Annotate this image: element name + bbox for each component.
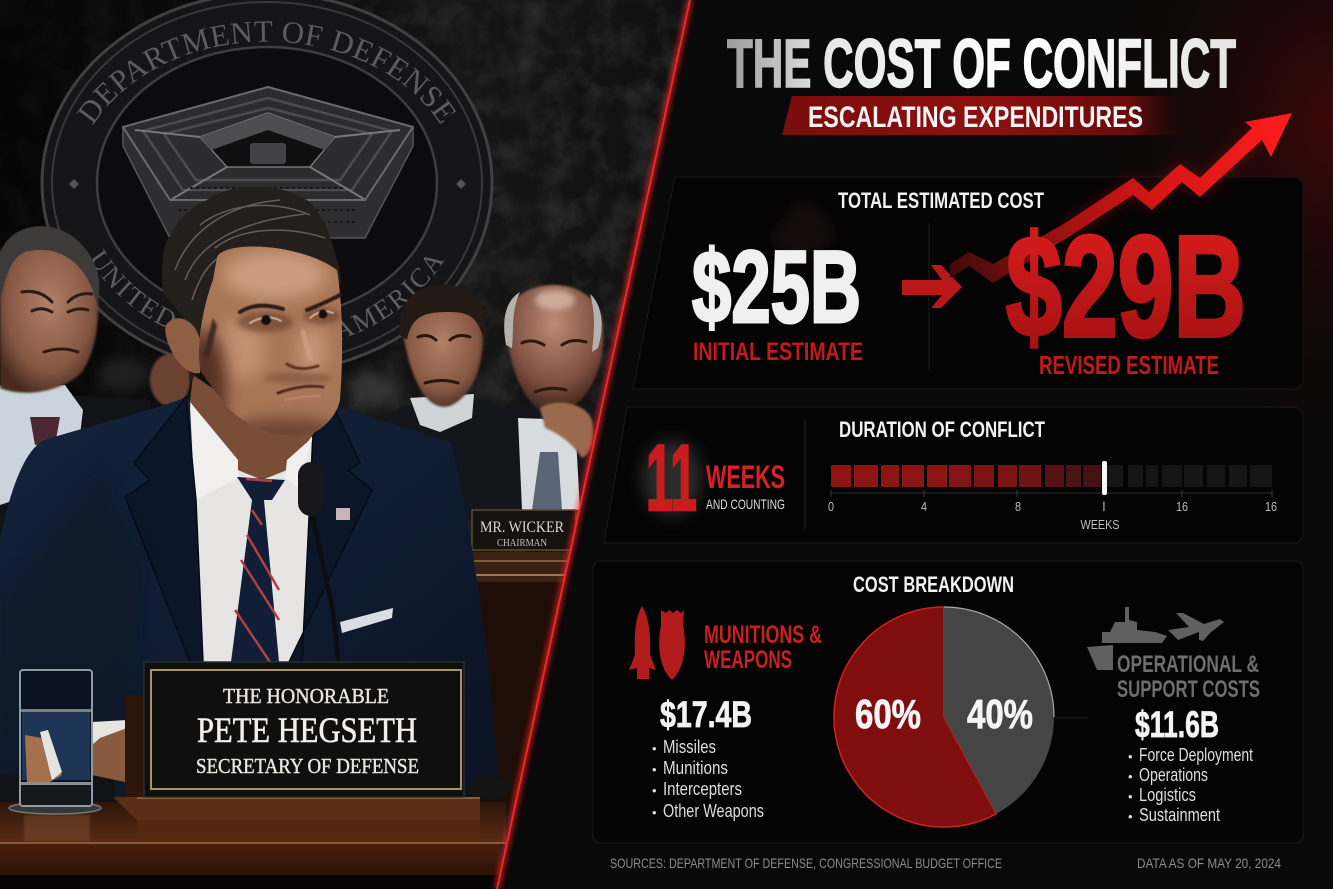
operational and support costs [1117, 651, 1260, 825]
11 weeks stat: AND COUNTING [706, 496, 785, 512]
pie chart: 40% [967, 691, 1033, 737]
operational and support costs: Force Deployment [1139, 745, 1253, 765]
hand [92, 720, 127, 782]
shirt [190, 407, 312, 662]
panel: duration of conflict [604, 407, 1303, 543]
operational and support costs: Sustainment [1139, 805, 1220, 825]
figure: Pete Hegseth [0, 187, 498, 800]
footer sources: SOURCES: DEPARTMENT OF DEFENSE, CONGRESSIONAL BUDGET OFFICE [610, 855, 1002, 871]
munitions and weapons: • [652, 783, 657, 798]
figure: man back center [378, 285, 520, 520]
subtitle banner: ESCALATING EXPENDITURES [808, 101, 1143, 134]
operational and support costs: Logistics [1139, 785, 1196, 805]
collar [190, 402, 313, 500]
11 weeks stat [642, 425, 785, 530]
sleeve shadow [0, 470, 140, 800]
nameplate: Mr. Wicker: MR. WICKER [480, 519, 564, 536]
munitions and weapons: Intercepters [663, 779, 742, 799]
figure: revised estimate: REVISED ESTIMATE [1039, 350, 1219, 380]
pie chart: 60% [855, 691, 921, 737]
pocket square [340, 608, 393, 633]
facial features [240, 295, 340, 400]
seal: department of defense: DEPARTMENT OF DEFENSE [76, 21, 456, 125]
suit [0, 397, 498, 800]
munitions and weapons [652, 621, 822, 821]
icon: seal diamonds [69, 179, 466, 189]
munitions and weapons: • [652, 741, 657, 756]
ear [165, 318, 200, 373]
neck [190, 375, 320, 480]
axis labels: 16 [1176, 499, 1188, 514]
nameplate: Pete Hegseth: THE HONORABLE [223, 684, 389, 708]
faint mountain silhouette [770, 200, 835, 262]
hair back [162, 187, 341, 383]
rising red arrow [950, 113, 1292, 283]
11 weeks stat: WEEKS [706, 459, 785, 495]
operational and support costs: • [1128, 789, 1133, 804]
operational and support costs: • [1128, 809, 1133, 824]
axis labels: 0 [828, 499, 834, 514]
figure: bald man right [435, 285, 610, 520]
figure: man back left [0, 226, 150, 560]
seal: department of defense [0, 0, 640, 889]
icon: missile and bomb [629, 606, 685, 680]
lapels [125, 397, 372, 662]
panel: total estimated cost [633, 177, 1303, 389]
right panel background [497, 0, 1333, 889]
figure: small face behind [150, 354, 190, 406]
nameplate: Mr. Wicker [472, 510, 576, 550]
weeks progress bar [828, 461, 1277, 532]
nameplate: Pete Hegseth: PETE HEGSETH [197, 710, 417, 750]
nameplate: Mr. Wicker: CHAIRMAN [497, 538, 547, 549]
heading: DURATION OF CONFLICT [839, 417, 1045, 442]
panel: cost breakdown [593, 561, 1303, 843]
rising arrow glow [1067, 132, 1262, 230]
nameplate: Pete Hegseth [144, 662, 464, 797]
axis labels: WEEKS [1080, 517, 1120, 532]
operational and support costs: OPERATIONAL & [1117, 651, 1259, 678]
munitions and weapons: Other Weapons [663, 801, 764, 821]
munitions and weapons: • [652, 762, 657, 777]
munitions and weapons: MUNITIONS & [704, 621, 822, 649]
operational and support costs: Operations [1139, 765, 1208, 785]
munitions and weapons: Missiles [663, 737, 716, 757]
hair strands [175, 200, 325, 300]
munitions and weapons: $17.4B [660, 694, 752, 735]
smoke texture [100, 359, 403, 406]
operational and support costs: • [1128, 769, 1133, 784]
11 weeks stat: 11 [646, 425, 697, 530]
axis labels [828, 499, 1277, 532]
footer sources: DATA AS OF MAY 20, 2024 [1137, 855, 1281, 871]
flag pin [336, 508, 350, 520]
pie chart [834, 607, 1054, 827]
figure: revised estimate [1006, 206, 1246, 380]
operational and support costs: SUPPORT COSTS [1117, 676, 1260, 703]
figure: initial estimate: INITIAL ESTIMATE [693, 338, 863, 366]
munitions and weapons: Munitions [663, 758, 728, 778]
axis labels: 16 [1265, 499, 1277, 514]
heading: TOTAL ESTIMATED COST [838, 188, 1044, 213]
munitions and weapons: WEAPONS [704, 646, 792, 674]
nameplate: Pete Hegseth: SECRETARY OF DEFENSE [196, 754, 419, 778]
icon: arrow right [902, 265, 962, 308]
icon: pentagon [123, 87, 413, 238]
sideburn [203, 318, 217, 357]
seal: department of defense: UNITED STATES OF AMERICA [92, 248, 444, 339]
face [199, 246, 342, 436]
axis labels: 4 [921, 499, 927, 514]
axis labels: l [1103, 499, 1106, 514]
tie [231, 477, 285, 662]
munitions and weapons: • [652, 805, 657, 820]
table [0, 775, 512, 889]
nameplate base [113, 695, 480, 820]
axis labels: 8 [1015, 499, 1021, 514]
icon: ship and plane [1087, 607, 1224, 670]
water glass [9, 670, 101, 814]
microphone [298, 462, 341, 662]
operational and support costs: $11.6B [1135, 704, 1219, 745]
operational and support costs: • [1128, 749, 1133, 764]
figure: initial estimate [692, 230, 863, 366]
red diagonal divider line [497, 0, 690, 889]
heading: COST BREAKDOWN [853, 572, 1014, 597]
podium [468, 552, 578, 812]
figure: initial estimate: $25B [692, 230, 861, 344]
